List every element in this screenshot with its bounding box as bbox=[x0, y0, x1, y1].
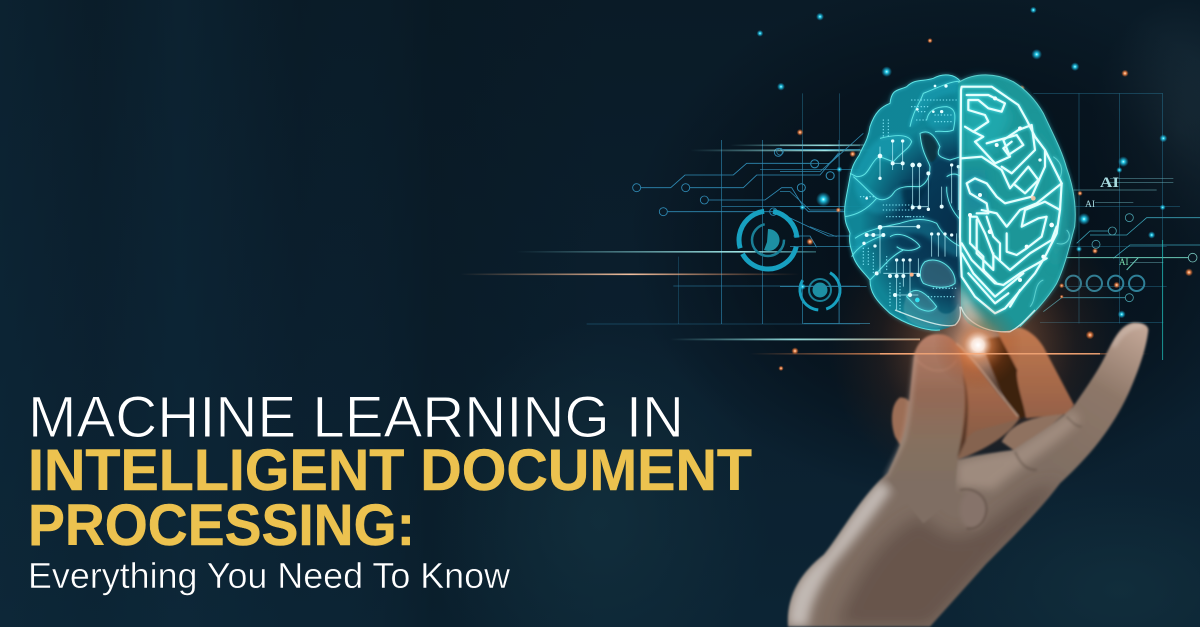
finger: index finger bbox=[886, 334, 964, 523]
brain bbox=[845, 75, 1075, 332]
background glow behind fingers bbox=[828, 195, 1128, 495]
glowing light at fingertip bbox=[934, 301, 1022, 389]
circuit lines right of brain bbox=[777, 93, 1200, 360]
palm and thumb bbox=[788, 323, 1148, 627]
AI labels: AI bbox=[1100, 175, 1119, 191]
fold outlines bbox=[845, 75, 961, 330]
finger: back small finger bbox=[892, 397, 913, 452]
orange streak over fingers bbox=[880, 353, 1100, 354]
left hemisphere base bbox=[845, 75, 961, 330]
heading line two: INTELLIGENT DOCUMENT bbox=[28, 438, 752, 503]
brain: halo bbox=[847, 75, 1075, 332]
left lobe lower outline bbox=[895, 307, 960, 326]
heading line one: MACHINE LEARNING IN bbox=[28, 385, 684, 450]
hand bbox=[788, 323, 1148, 627]
circuit lines left of brain bbox=[587, 140, 860, 324]
bottom lobe outline bbox=[961, 307, 1035, 332]
fingernail area bbox=[917, 360, 957, 371]
finger shadows bbox=[957, 373, 968, 458]
finger: middle finger bbox=[950, 339, 1019, 460]
glowing particles bbox=[757, 7, 1193, 383]
AI labels bbox=[1085, 175, 1128, 267]
AI labels: AI bbox=[1119, 257, 1128, 267]
bright fold regions bbox=[853, 81, 961, 257]
icon row: four small circles bbox=[1066, 276, 1144, 291]
brain: left hemisphere bbox=[845, 75, 961, 330]
lit edge on middle finger bbox=[957, 343, 1018, 417]
knuckles under fingers bbox=[1002, 407, 1073, 450]
title bbox=[28, 385, 752, 596]
gap shadow between fingers bbox=[980, 337, 1026, 420]
light streaks bbox=[460, 144, 1150, 355]
AI labels: AI bbox=[1085, 200, 1095, 210]
teal glow patches bbox=[958, 90, 1072, 327]
icon: small radial gauge bbox=[793, 263, 847, 317]
icon: large radial gauge bbox=[734, 206, 802, 274]
heading line three: PROCESSING: bbox=[28, 493, 415, 558]
subtitle: Everything You Need To Know bbox=[28, 555, 511, 596]
index finger left highlight bbox=[886, 355, 915, 477]
brain: right hemisphere bbox=[958, 75, 1075, 332]
right hemisphere base bbox=[958, 75, 1075, 331]
white circuit maze bbox=[960, 87, 1062, 313]
finger: ring finger bbox=[997, 326, 1074, 418]
maze nodes bbox=[968, 96, 1054, 282]
pale lower lobes bbox=[904, 259, 961, 328]
palm shading bbox=[788, 325, 1143, 627]
void areas bbox=[920, 133, 938, 162]
circuit traces and nodes bbox=[867, 142, 958, 310]
lobe outlines bbox=[958, 75, 1075, 327]
